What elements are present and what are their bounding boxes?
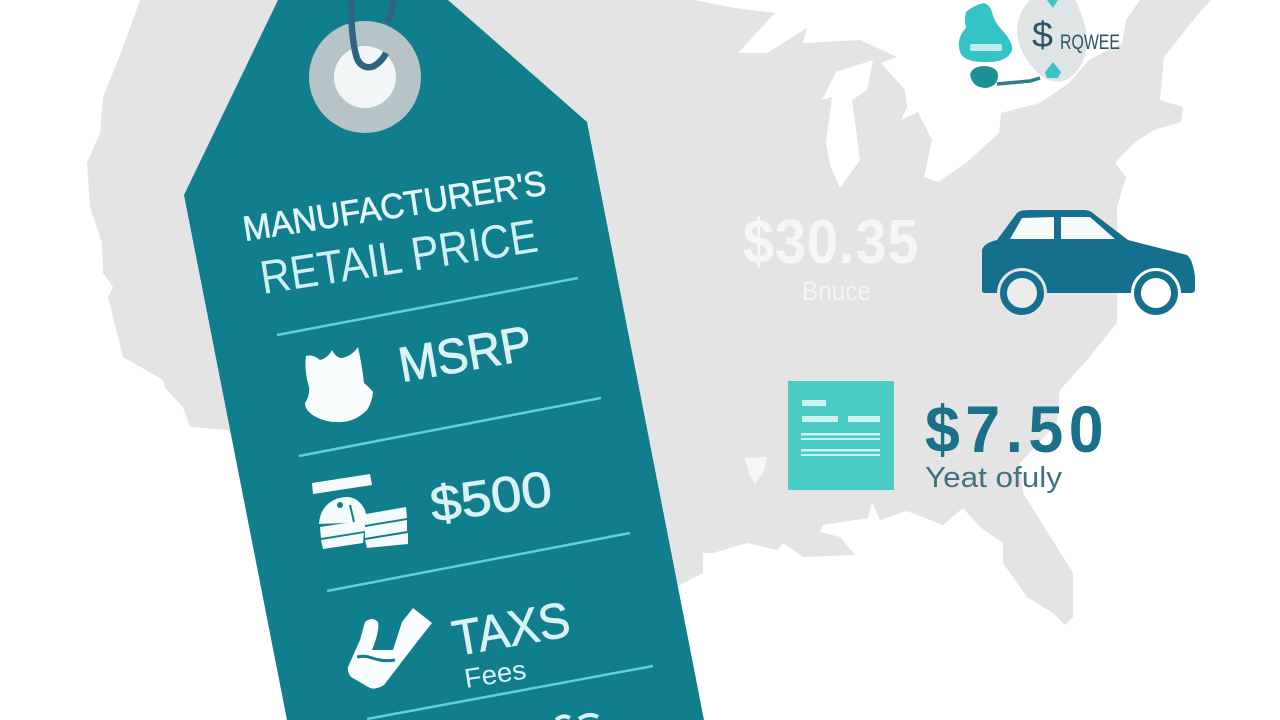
icon: shield <box>305 347 373 422</box>
icon: check tool <box>348 608 432 689</box>
car windows <box>1010 217 1115 239</box>
stat: $7.50: $7.50 <box>925 393 1104 466</box>
top knot <box>1047 0 1058 8</box>
TAXS label: TAXS <box>448 591 574 667</box>
map of the United States <box>87 0 1211 625</box>
small teal knot <box>1045 62 1061 78</box>
stat: $30.35 <box>743 208 918 306</box>
tag heading: MANUFACTURER'S <box>240 164 549 249</box>
tag heading <box>240 164 549 304</box>
icon: document <box>788 381 894 490</box>
grey coin bag <box>1017 0 1087 82</box>
MSRP label: MSRP <box>395 316 536 393</box>
stat caption: Yeat ofuly <box>925 462 1063 494</box>
tag eyelet <box>309 21 421 133</box>
bag caption: RQWEE <box>1060 31 1120 54</box>
icon: money bags at top right <box>959 0 1120 88</box>
divider lines <box>277 278 653 719</box>
chain <box>997 78 1040 84</box>
cropped figure tops at tag bottom <box>556 715 598 720</box>
dark teal weight <box>970 66 998 88</box>
dollar sign: $ <box>1032 14 1053 55</box>
teal bag <box>959 3 1012 62</box>
tag body <box>184 0 704 720</box>
tag heading: RETAIL PRICE <box>256 209 541 304</box>
hanging cord <box>351 0 394 67</box>
icon: car <box>982 210 1195 312</box>
stat: $30.35: $30.35 <box>743 208 919 277</box>
price tag <box>184 0 704 720</box>
Fees label: Fees <box>462 655 528 694</box>
stat caption: Bnuce <box>802 276 871 306</box>
icon: money stack <box>312 474 408 549</box>
car wheels <box>1004 274 1040 312</box>
$500 label: $500 <box>427 460 555 533</box>
bag label <box>970 44 1002 51</box>
